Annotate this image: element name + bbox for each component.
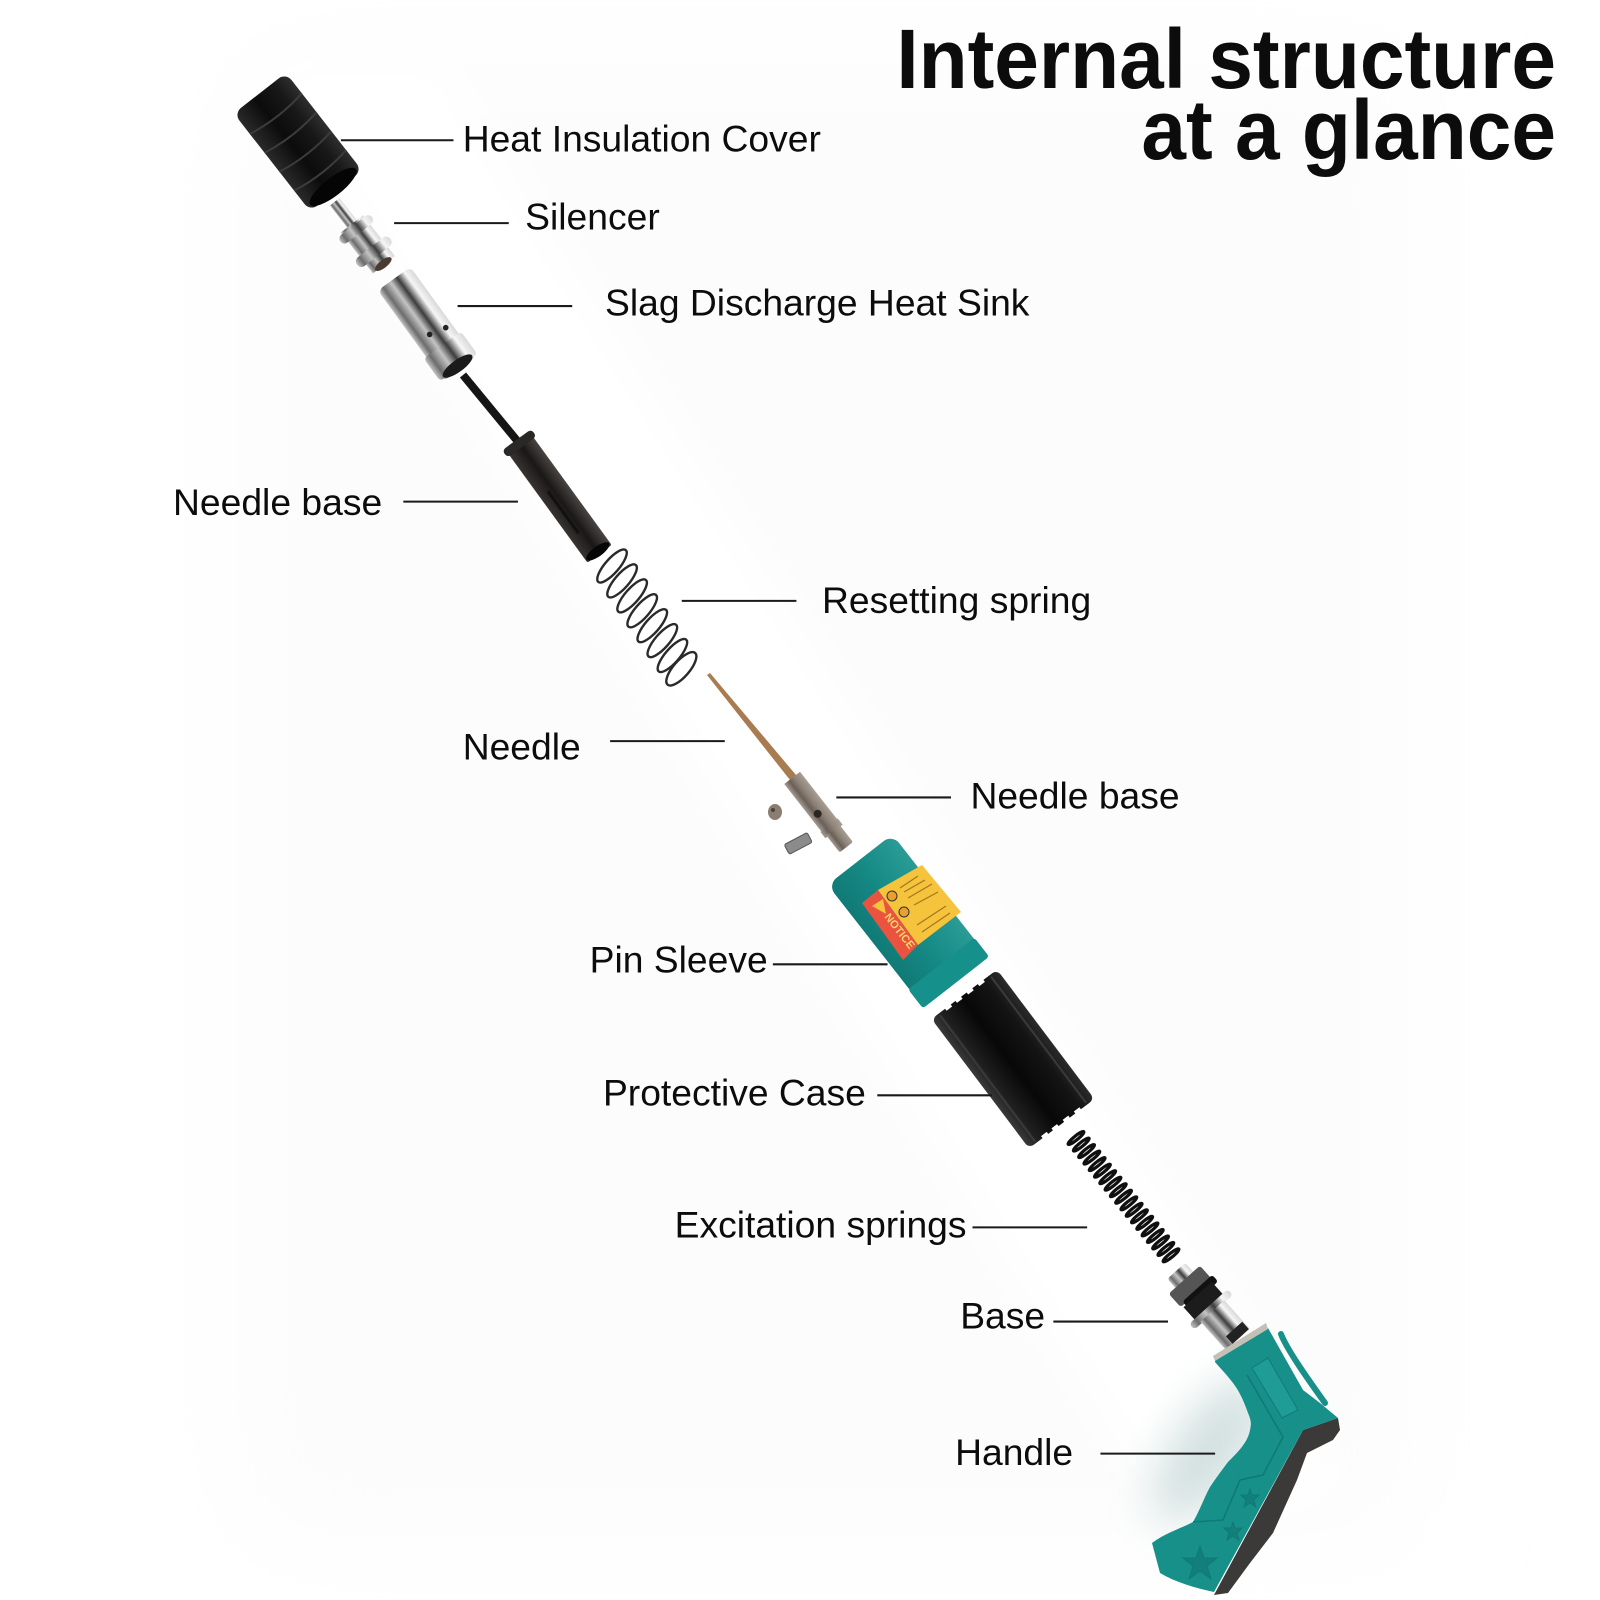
part: small screw and spring — [768, 804, 812, 854]
label: silencer: Silencer — [525, 195, 660, 237]
label: excitation springs: Excitation springs — [675, 1204, 967, 1246]
label: resetting spring: Resetting spring — [822, 579, 1091, 621]
label: needle base upper: Needle base — [173, 481, 382, 523]
label: heat insulation cover: Heat Insulation Cover — [463, 118, 821, 160]
part: needle — [707, 673, 855, 854]
part: handle — [1132, 1323, 1340, 1595]
label: base: Base — [960, 1295, 1045, 1337]
notice label: NOTICE — [882, 911, 917, 952]
title: Internal structure — [896, 13, 1556, 106]
part: needle base rod — [463, 375, 615, 566]
notice label — [862, 865, 961, 960]
handle clip — [1281, 1334, 1325, 1403]
part: resetting spring — [587, 543, 707, 692]
label: handle: Handle — [955, 1431, 1073, 1473]
stars on handle — [1183, 1489, 1259, 1579]
exploded tool diagram — [234, 73, 1340, 1595]
part: slag discharge heat sink — [375, 265, 480, 384]
part: base — [1157, 1253, 1257, 1357]
title — [896, 13, 1556, 177]
label: needle: Needle — [463, 726, 581, 768]
part: silencer — [318, 189, 402, 280]
label: needle base lower: Needle base — [970, 775, 1180, 817]
title: at a glance — [1141, 84, 1556, 177]
part: heat insulation cover — [234, 73, 365, 214]
label: protective case: Protective Case — [603, 1072, 866, 1114]
handle rim — [1213, 1323, 1268, 1361]
part: excitation springs — [1067, 1130, 1180, 1263]
label: pin sleeve: Pin Sleeve — [590, 938, 768, 980]
part: protective case — [932, 970, 1094, 1148]
part: pin sleeve — [827, 834, 989, 1008]
callout labels — [173, 118, 1215, 1473]
label: slag discharge heat sink: Slag Discharge Heat Sink — [605, 281, 1030, 323]
handle panel — [1252, 1358, 1298, 1418]
